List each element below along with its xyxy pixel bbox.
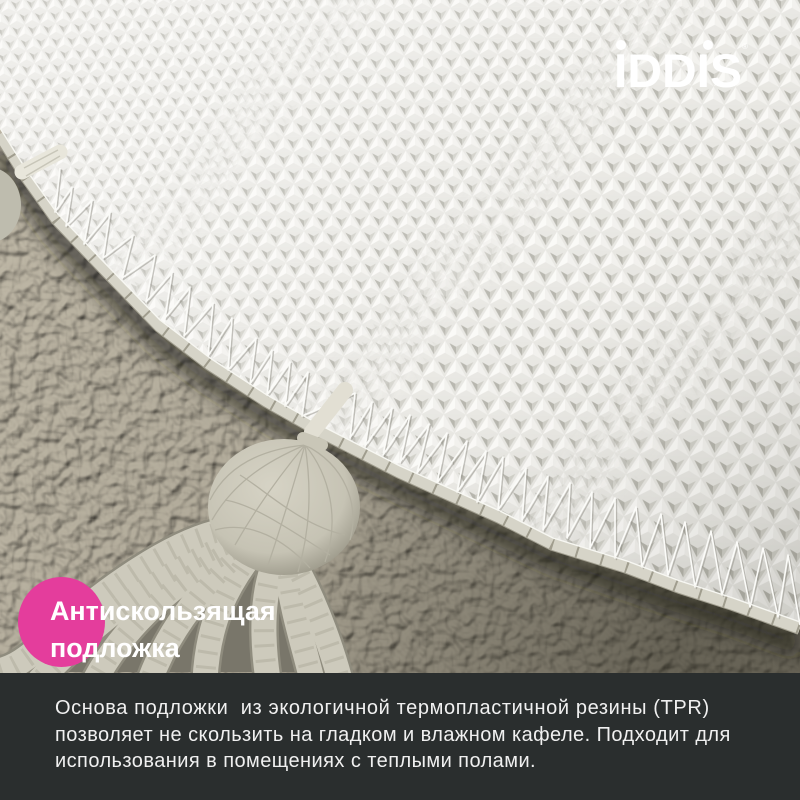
text block: description: Основа подложки из экологичной термопластичной резины (TPR) xyxy=(55,697,710,719)
logo: IDDIS: ® xyxy=(742,42,748,51)
text block: description: использования в помещениях с теплыми полами. xyxy=(55,750,536,772)
panel: description bar xyxy=(0,673,800,800)
heading: Антискользящая xyxy=(50,596,276,626)
logo: IDDIS: IDDIS xyxy=(614,44,742,97)
heading: подложка xyxy=(50,633,180,663)
panel: white mat with triangle relief xyxy=(0,0,800,621)
badge: pink circle xyxy=(18,577,105,667)
text block: description xyxy=(55,697,731,772)
heading xyxy=(50,596,276,663)
text block: description: позволяет не скользить на гладком и влажном кафеле. Подходит для xyxy=(55,724,731,746)
